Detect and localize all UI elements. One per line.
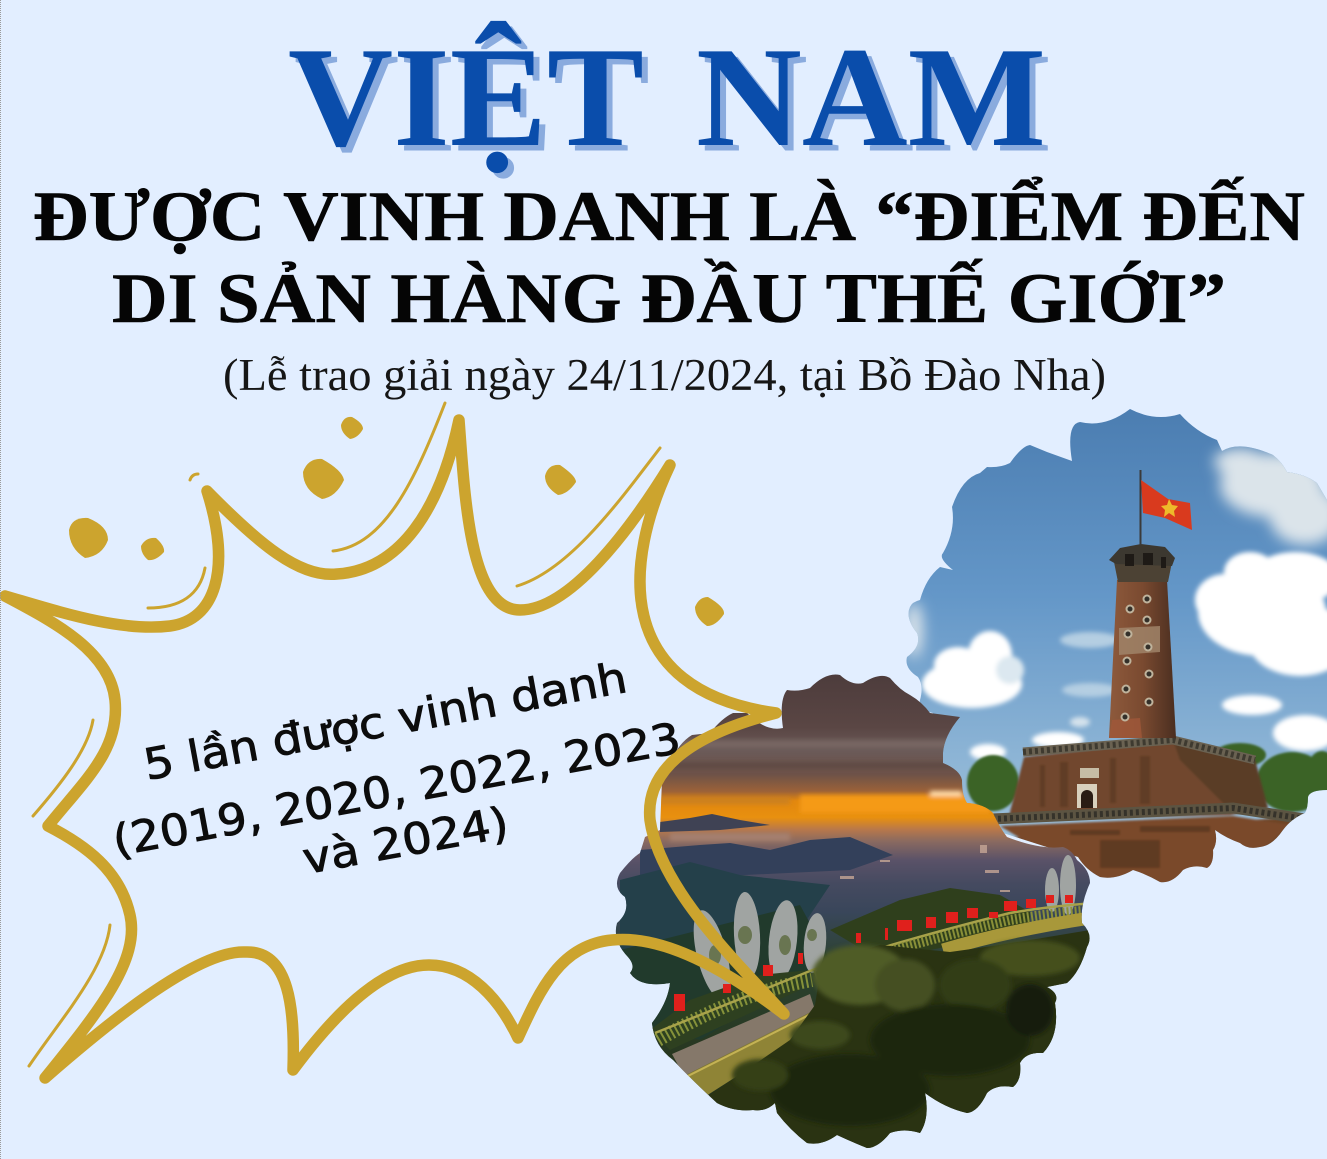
title: VIỆT NAM bbox=[288, 18, 1052, 182]
title: VIỆT NAM: VIỆT bbox=[288, 18, 644, 176]
gate bbox=[1077, 784, 1097, 808]
upper railing bbox=[1023, 740, 1255, 760]
title: VIỆT NAM: NAM bbox=[702, 24, 1052, 182]
bridge rail bbox=[658, 980, 812, 1040]
fort bbox=[1000, 744, 1298, 882]
lantern bbox=[1114, 562, 1172, 582]
burst text: 5 honours bbox=[109, 653, 685, 885]
mountains bbox=[660, 814, 770, 832]
hand fingers bbox=[686, 855, 1076, 1003]
decorative gold dots bbox=[69, 417, 724, 626]
burst text: 5 honours: 5 lần được vinh danh bbox=[140, 653, 631, 791]
forest behind left bbox=[650, 970, 810, 1050]
bridge deck bbox=[672, 994, 815, 1076]
forest bbox=[700, 930, 1090, 1150]
valley lights bbox=[840, 845, 1010, 892]
heading: award title: DI SẢN HÀNG ĐẦU THẾ GIỚI” bbox=[112, 257, 1226, 338]
subtitle: ceremony date: (Lễ trao giải ngày 24/11/2024, tại Bồ Đào Nha) bbox=[223, 350, 1106, 400]
photo: Hanoi flag tower bbox=[900, 400, 1327, 900]
title: VIỆT NAM: VIỆT bbox=[294, 24, 650, 182]
burst text: 5 honours: và 2024) bbox=[299, 798, 513, 885]
green hill bbox=[830, 888, 1030, 950]
clouds bbox=[905, 448, 1327, 760]
photo: Golden Bridge at sunset bbox=[610, 670, 1100, 1159]
speech burst outline bbox=[5, 420, 784, 1078]
tower windows bbox=[1122, 596, 1152, 720]
burst accent strokes bbox=[29, 403, 660, 1066]
heading: award title: ĐƯỢC VINH DANH LÀ “ĐIỂM ĐẾN bbox=[33, 175, 1305, 256]
lower railing bbox=[992, 808, 1305, 819]
red flags bbox=[674, 895, 1073, 1011]
heading: award title bbox=[33, 175, 1305, 338]
title: VIỆT NAM: NAM bbox=[696, 18, 1046, 176]
burst text: 5 honours: (2019, 2020, 2022, 2023 bbox=[109, 714, 685, 867]
left edge line bbox=[0, 0, 2, 1159]
trees bbox=[967, 743, 1327, 812]
tower shaft bbox=[1109, 580, 1176, 738]
flag pole and flag bbox=[1140, 470, 1142, 545]
sunset cloud bands bbox=[660, 740, 990, 841]
